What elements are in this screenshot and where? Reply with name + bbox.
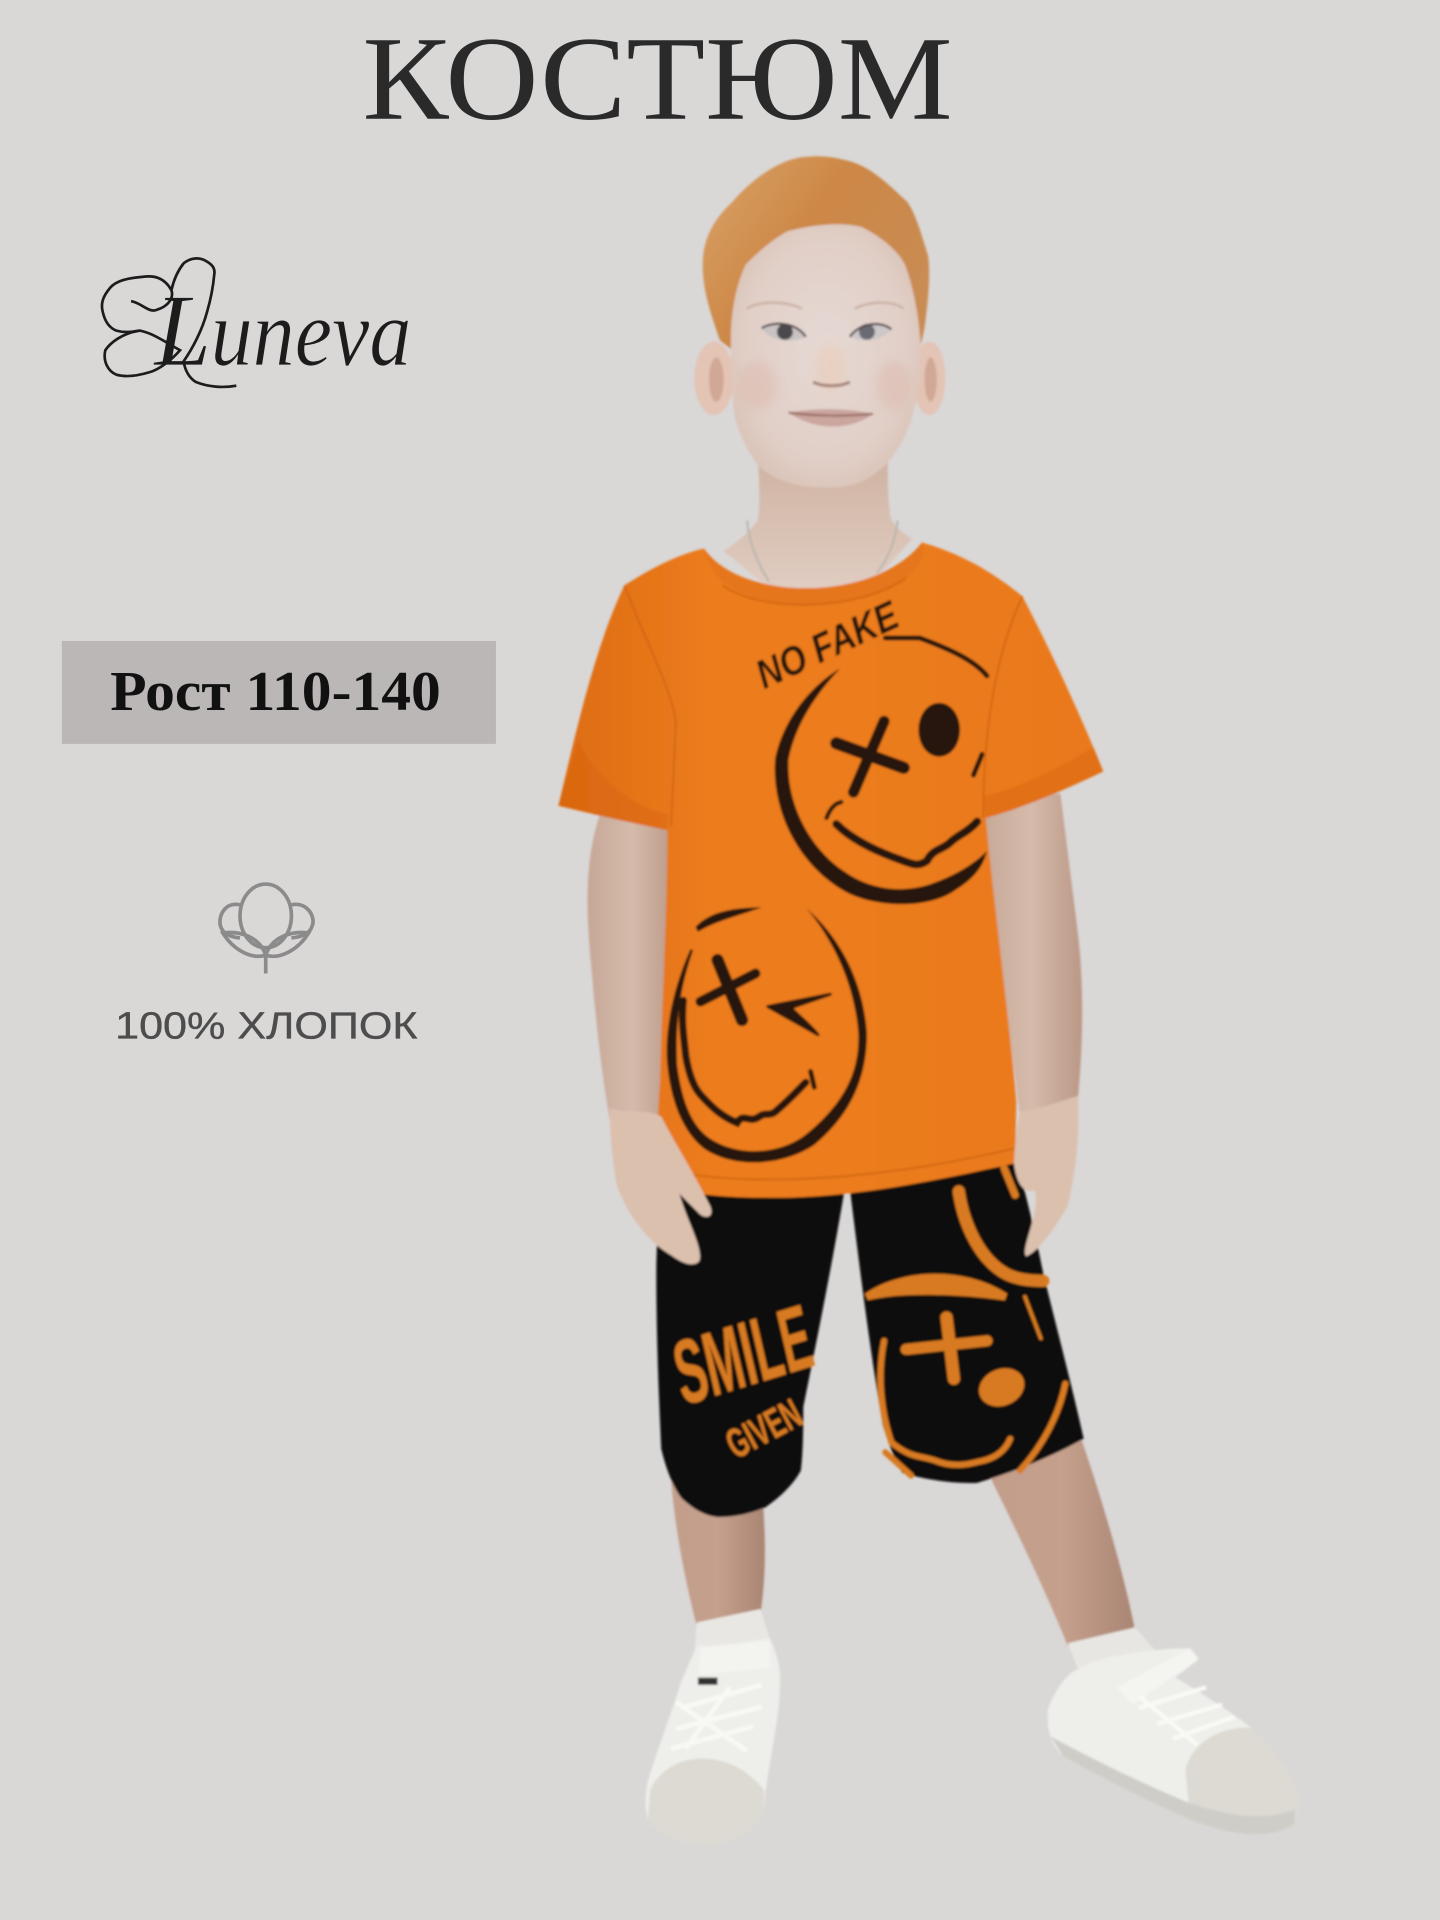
shirt print: NO FAKE: NO FAKE (748, 591, 906, 698)
cotton label: 100% ХЛОПОК (115, 1005, 418, 1047)
head (694, 156, 945, 488)
left sock (694, 1609, 773, 1656)
brand logo: Luneva: uneva (211, 280, 411, 386)
right sock (1068, 1627, 1157, 1690)
left leg (671, 1476, 765, 1626)
mouth (789, 409, 873, 427)
shorts print: smile text (665, 1286, 821, 1468)
icon: cotton boll (220, 884, 313, 973)
collar (704, 542, 924, 604)
brand logo: Luneva: L (152, 274, 211, 388)
hair (703, 156, 929, 349)
height badge (62, 641, 496, 744)
shirt print: lower smiley (667, 907, 867, 1162)
cheeks (737, 343, 911, 410)
left shoe (645, 1638, 780, 1845)
shorts print: smiley (867, 1168, 1065, 1476)
ears (694, 342, 733, 415)
shorts print: smile text: GIVEN (718, 1389, 809, 1468)
t-shirt (558, 542, 1103, 1198)
hands (610, 1096, 1078, 1264)
shorts print: smile text: SMILE (665, 1286, 821, 1425)
right shoe (1048, 1648, 1299, 1834)
shirt print: upper smiley (775, 638, 987, 904)
child figure (558, 156, 1299, 1845)
title: КОСТЮМ (362, 12, 953, 145)
shorts (656, 1157, 1084, 1517)
sleeve shading (558, 741, 1103, 830)
necklace (747, 520, 898, 582)
arms (588, 793, 1082, 1120)
face (730, 223, 921, 488)
height badge: Рост 110-140 (110, 661, 441, 723)
seams (624, 578, 1022, 1180)
eyes (747, 303, 904, 341)
nose (813, 382, 850, 386)
brand logo: Luneva (102, 258, 411, 388)
right leg (989, 1439, 1135, 1646)
neck (724, 459, 912, 600)
